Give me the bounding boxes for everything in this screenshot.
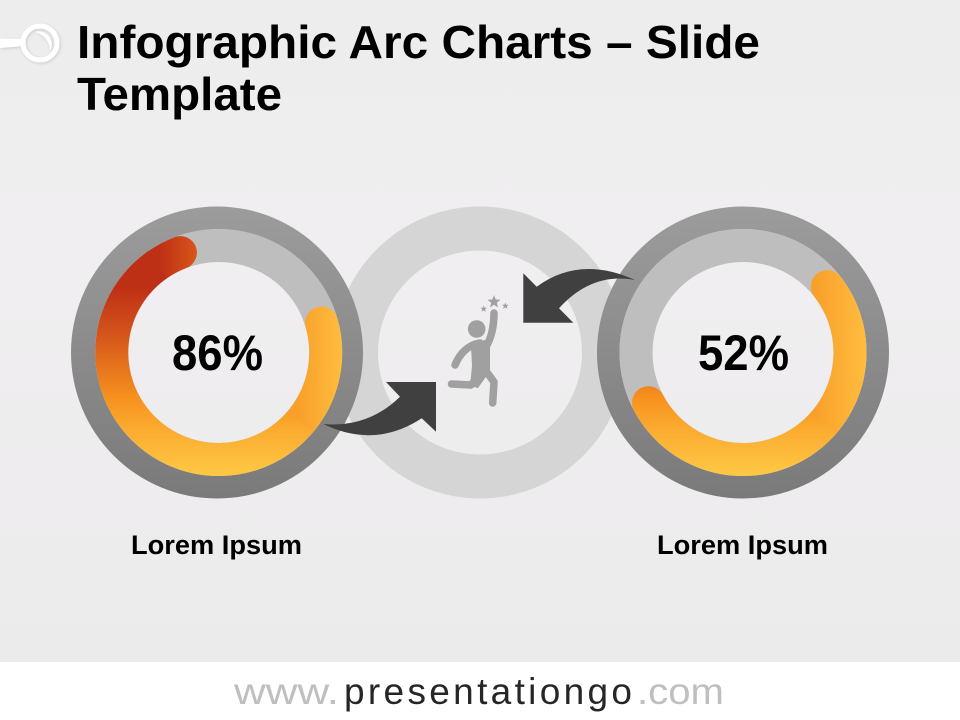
arrow: right chart to figure	[523, 269, 635, 323]
label: right chart: Lorem Ipsum	[657, 530, 828, 560]
title: Infographic Arc Charts – Slide	[77, 16, 760, 68]
arrow: left chart to figure	[323, 382, 436, 435]
right arc chart: 52%: 52%	[698, 325, 789, 381]
left arc chart: 86%	[71, 207, 363, 499]
label: left chart: Lorem Ipsum	[131, 530, 302, 560]
footer: website url: presentationgo	[344, 671, 632, 712]
logo: ring pin icon	[0, 26, 57, 60]
footer: website url: .com	[637, 671, 724, 712]
icon: person reaching for stars	[452, 295, 509, 403]
footer: website url	[233, 671, 724, 712]
footer: website url: www.	[233, 671, 339, 712]
left arc chart: 86%: 86%	[172, 325, 263, 381]
right arc chart: 52%	[608, 218, 878, 487]
text: Template	[77, 68, 282, 120]
middle ring	[356, 228, 604, 476]
